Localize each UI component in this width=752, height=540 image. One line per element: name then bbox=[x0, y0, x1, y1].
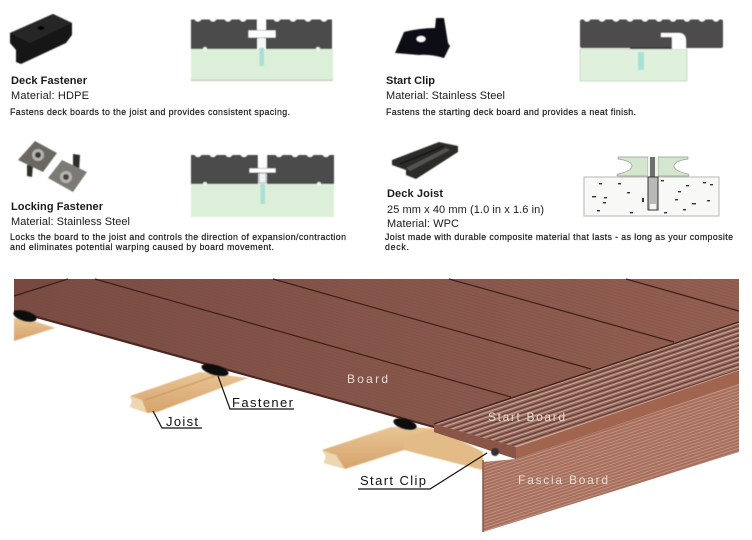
heading: locking fastener: Locking Fastener bbox=[11, 201, 104, 213]
heading: deck joist: Deck Joist bbox=[387, 188, 443, 200]
illustration: deck assembly bbox=[12, 279, 739, 532]
description: start clip: Fastens the starting deck board and provides a neat finish. bbox=[386, 107, 636, 117]
dimensions: 25 mm x 40 mm (1.0 in x 1.6 in) bbox=[387, 204, 544, 216]
label: board: Board bbox=[347, 372, 388, 386]
icon: deck fastener block bbox=[10, 14, 72, 64]
material: stainless steel: Material: Stainless Steel bbox=[386, 90, 505, 102]
callout: joist bbox=[153, 411, 202, 429]
material: HDPE: Material: HDPE bbox=[11, 90, 89, 102]
callout: start clip bbox=[358, 453, 487, 489]
icon: deck joist profile bbox=[392, 142, 458, 179]
deck boards bbox=[14, 279, 739, 428]
diagram: locking fastener section bbox=[191, 153, 334, 217]
material: WPC: Material: WPC bbox=[387, 218, 459, 230]
label: fascia board: Fascia Board bbox=[518, 473, 608, 487]
description: deck fastener: Fastens deck boards to the joist and provides consistent spacing. bbox=[10, 107, 290, 117]
joists bbox=[14, 318, 483, 470]
icon: start clip bbox=[395, 18, 450, 58]
description: locking fastener: Locks the board to the joist and controls the direction of expansion/contraction bbox=[10, 232, 346, 242]
callout: start clip: Start Clip bbox=[360, 473, 426, 488]
diagram: deck fastener section bbox=[191, 18, 333, 81]
diagram: start clip section bbox=[580, 18, 723, 81]
callout: fastener: Fastener bbox=[232, 395, 294, 410]
callout: fastener bbox=[218, 376, 294, 410]
panel: deck fastener bbox=[10, 14, 333, 117]
start board bbox=[434, 322, 739, 459]
heading: deck fastener: Deck Fastener bbox=[11, 75, 88, 87]
material: stainless steel: Material: Stainless Steel bbox=[11, 216, 130, 228]
label: start board: Start Board bbox=[488, 410, 565, 424]
icon: locking fastener bbox=[18, 141, 87, 192]
diagram: joist section bbox=[584, 157, 719, 216]
description: deck joist bbox=[385, 232, 733, 252]
fasteners bbox=[12, 308, 499, 456]
panel: locking fastener bbox=[10, 141, 346, 252]
description: locking fastener bbox=[10, 232, 346, 252]
fascia board bbox=[483, 384, 739, 532]
description: deck joist: Joist made with durable composite material that lasts - as long as your composite bbox=[385, 232, 733, 242]
description: deck joist: deck. bbox=[385, 242, 409, 252]
heading: start clip: Start Clip bbox=[386, 75, 435, 87]
panel: start clip bbox=[386, 18, 723, 117]
panel: deck joist bbox=[385, 142, 733, 252]
callout: joist: Joist bbox=[166, 414, 198, 429]
description: locking fastener: and eliminates potential warping caused by board movement. bbox=[10, 242, 274, 252]
